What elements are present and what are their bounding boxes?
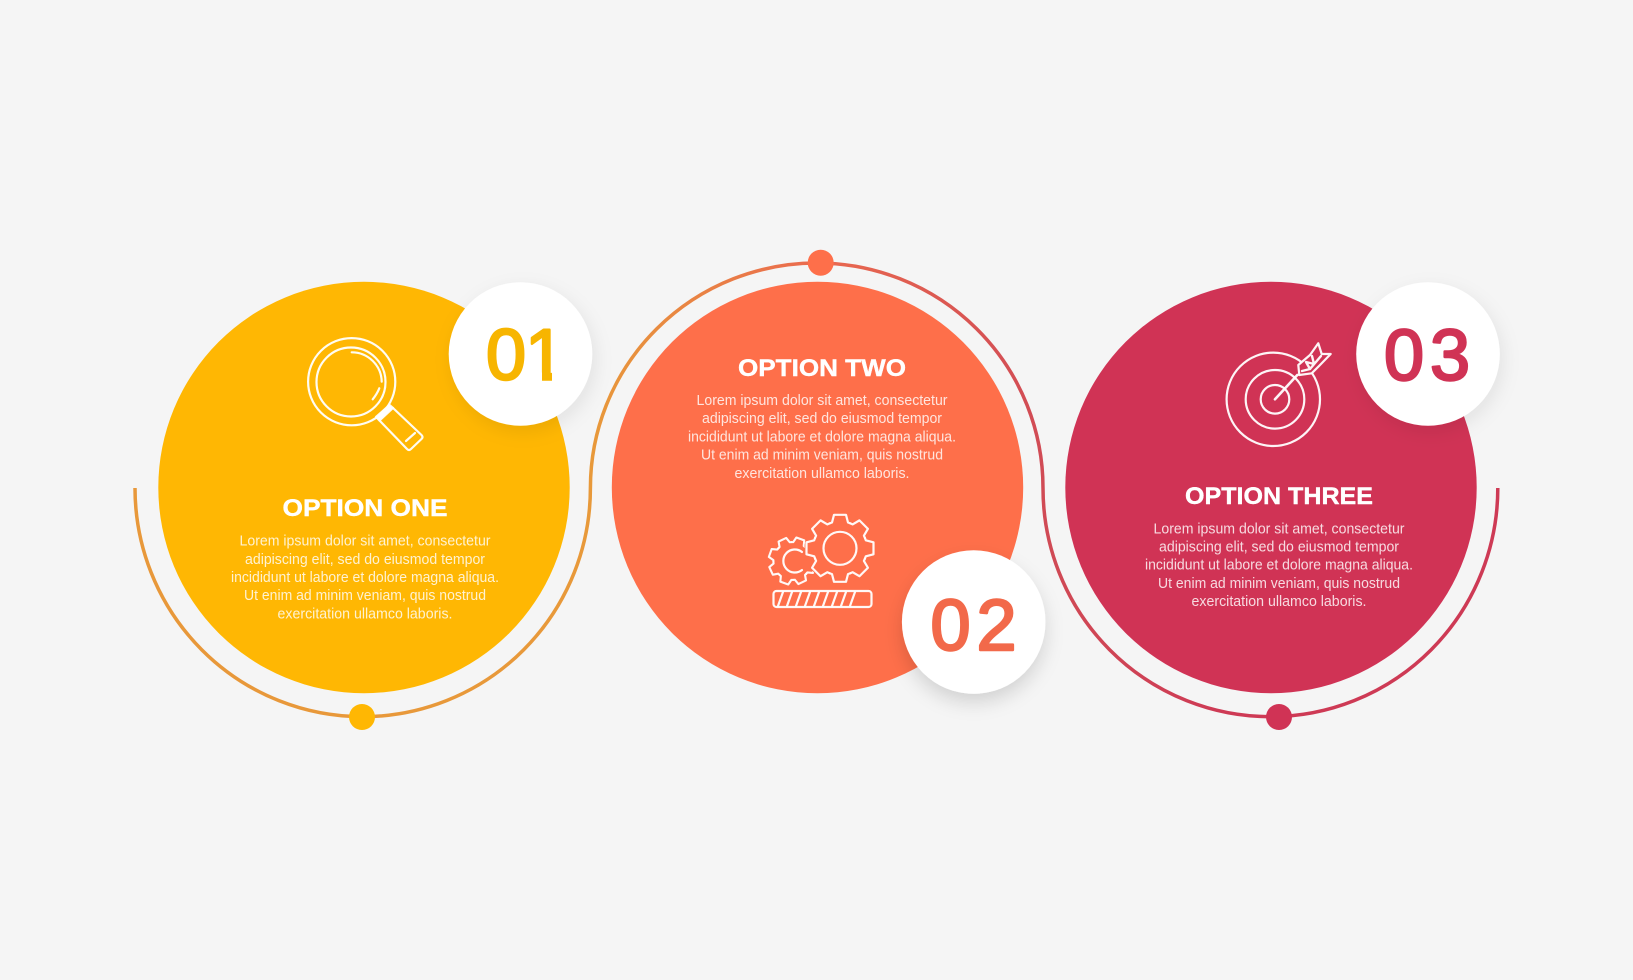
circle: option three <box>1065 282 1477 693</box>
text: option three description: Lorem ipsum dolor sit amet, consectetur <box>1154 521 1405 537</box>
icon: gears and progress bar <box>762 513 876 607</box>
panel: option three <box>1065 282 1500 730</box>
heading: option two: OPTION TWO <box>738 355 906 382</box>
heading: option one: OPTION ONE <box>282 495 448 522</box>
icon: target with arrow <box>1227 343 1331 446</box>
heading: option three: OPTION THREE <box>1185 483 1373 510</box>
dot: option one connector <box>349 704 375 730</box>
text: option two description: exercitation ullamco laboris. <box>734 466 910 482</box>
badge: 01: 01 <box>486 316 565 396</box>
text: option one description: Lorem ipsum dolor sit amet, consectetur <box>240 534 491 550</box>
text: option one description: exercitation ullamco laboris. <box>278 606 452 622</box>
text: option three description <box>1145 521 1413 610</box>
text: option one description: Ut enim ad minim veniam, quis nostrud <box>244 588 486 604</box>
icon: magnifying glass <box>308 338 422 450</box>
text: option two description: incididunt ut labore et dolore magna aliqua. <box>688 429 956 445</box>
badge: 02 <box>902 550 1046 694</box>
text: option one description <box>231 534 499 622</box>
text: option two description: Lorem ipsum dolor sit amet, consectetur <box>696 393 948 409</box>
text: option two description: adipiscing elit, sed do eiusmod tempor <box>702 411 942 427</box>
text: option two description: Ut enim ad minim veniam, quis nostrud <box>701 448 943 464</box>
text: option one description: incididunt ut labore et dolore magna aliqua. <box>231 570 499 586</box>
text: option three description: incididunt ut labore et dolore magna aliqua. <box>1145 558 1413 574</box>
dot: option two connector <box>808 250 834 276</box>
connector: wavy line linking the three circles <box>135 263 1498 717</box>
text: option three description: exercitation ullamco laboris. <box>1192 594 1366 610</box>
panel: option one <box>158 282 592 730</box>
text: option three description: Ut enim ad minim veniam, quis nostrud <box>1158 576 1400 592</box>
badge: 02: 02 <box>930 586 1023 666</box>
badge: 03 <box>1356 282 1500 426</box>
text: option two description <box>688 393 956 482</box>
text: option one description: adipiscing elit, sed do eiusmod tempor <box>245 552 485 568</box>
badge: 01 <box>449 282 592 426</box>
dot: option three connector <box>1266 704 1292 730</box>
circle: option two <box>612 282 1023 693</box>
panel: option two <box>612 250 1046 694</box>
circle: option one <box>158 282 570 693</box>
text: option three description: adipiscing elit, sed do eiusmod tempor <box>1159 540 1399 556</box>
badge: 03: 03 <box>1384 316 1476 396</box>
